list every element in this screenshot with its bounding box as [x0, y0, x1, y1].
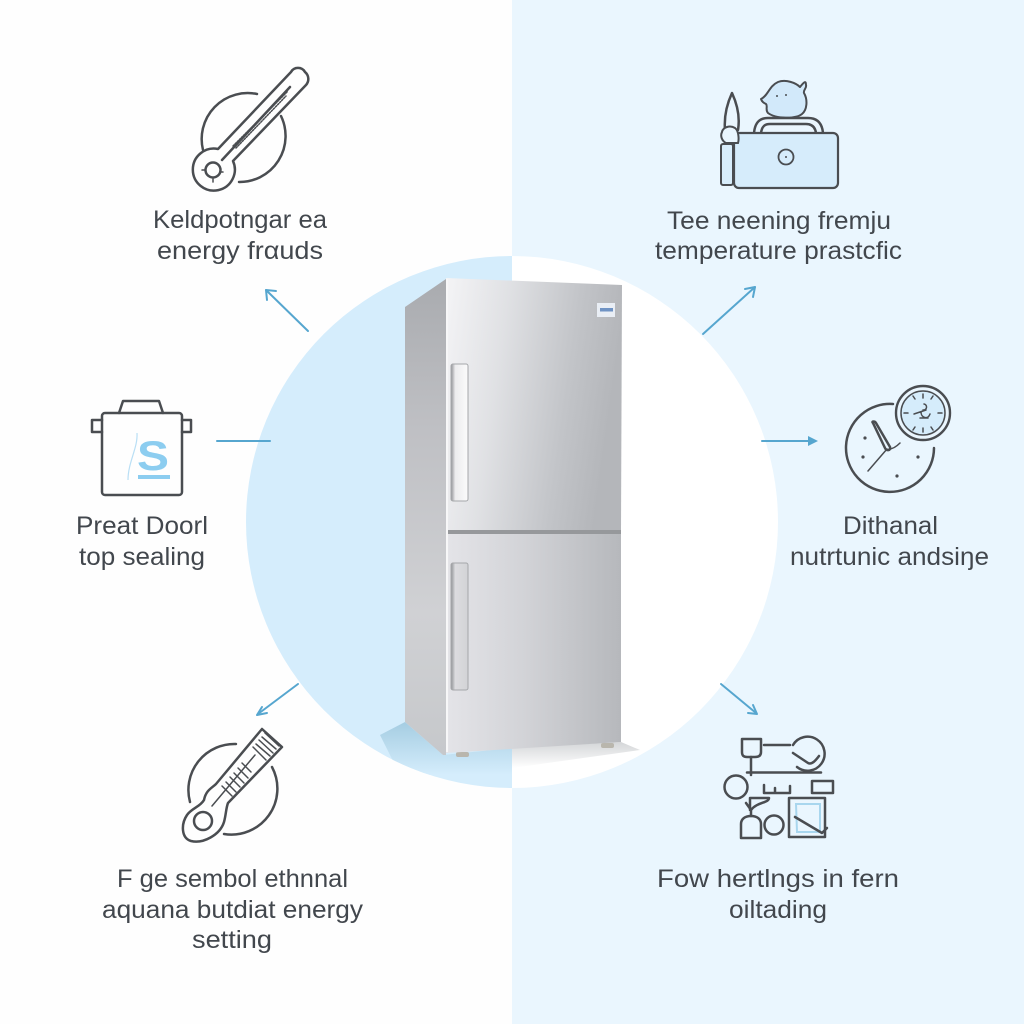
badge: [597, 303, 615, 317]
text: left label: top sealing: [79, 543, 205, 571]
blob figure: [761, 81, 806, 118]
text: left label: Preat Doorl: [76, 512, 208, 540]
fridge lower door: [446, 534, 621, 753]
central circle: [246, 256, 778, 788]
icon: pot left: [92, 401, 191, 495]
refrigerator: [405, 278, 622, 757]
lower handle: [451, 563, 468, 690]
text: bottom right label: [657, 865, 899, 924]
text: top left label: [153, 206, 327, 265]
arrow: top left: [266, 290, 308, 331]
fridge side panel: [405, 279, 446, 755]
fist: [721, 127, 739, 143]
icon: thermometer bottom left: [183, 729, 282, 842]
text: top right label: Tee neening fremju: [667, 207, 891, 235]
laptop handle: [754, 118, 823, 133]
text: left label: [76, 512, 208, 571]
arrow: right: [762, 436, 818, 446]
fridge feet: [456, 743, 614, 757]
text: top right label: [655, 207, 902, 265]
fridge door gap: [446, 530, 621, 534]
text: right label: Dithanal: [843, 512, 938, 540]
icon: diagram bottom right: [724, 737, 833, 838]
arrow: left: [217, 440, 270, 442]
arrow: top right: [703, 287, 755, 334]
door edge highlight: [446, 279, 448, 752]
text: bottom right label: oiltading: [729, 896, 827, 924]
text: bottom left label: aquana butdiat energy: [102, 896, 364, 924]
fridge upper door: [446, 278, 622, 531]
background: pale blue right half: [512, 0, 1024, 1024]
text: top right label: temperature prastcfic: [655, 237, 902, 265]
icon: pot left: S: [137, 432, 169, 479]
text: bottom left label: [102, 865, 364, 954]
arrow: bottom left: [257, 684, 298, 715]
text: bottom right label: Fow hertlngs in fern: [657, 865, 899, 893]
icon: thermometer top left: [193, 68, 308, 191]
text: top left label: Keldpotngar ea: [153, 206, 327, 234]
text: bottom left label: setting: [192, 926, 272, 954]
laptop body: [734, 133, 838, 188]
text: bottom left label: F ge sembol ethnnal: [117, 865, 348, 893]
knife blade: [725, 93, 739, 130]
icon: laptop and figure top right: [721, 81, 838, 188]
text: right label: nutrtunic andsiŋe: [790, 543, 989, 571]
text: top left label: energy frαuds: [157, 237, 323, 265]
knife handle: [721, 144, 733, 185]
upper handle: [451, 364, 468, 501]
text: right label: [790, 512, 989, 571]
icon: clock right: [846, 386, 950, 492]
arrow: bottom right: [721, 684, 757, 714]
background: white left half: [0, 0, 512, 1024]
